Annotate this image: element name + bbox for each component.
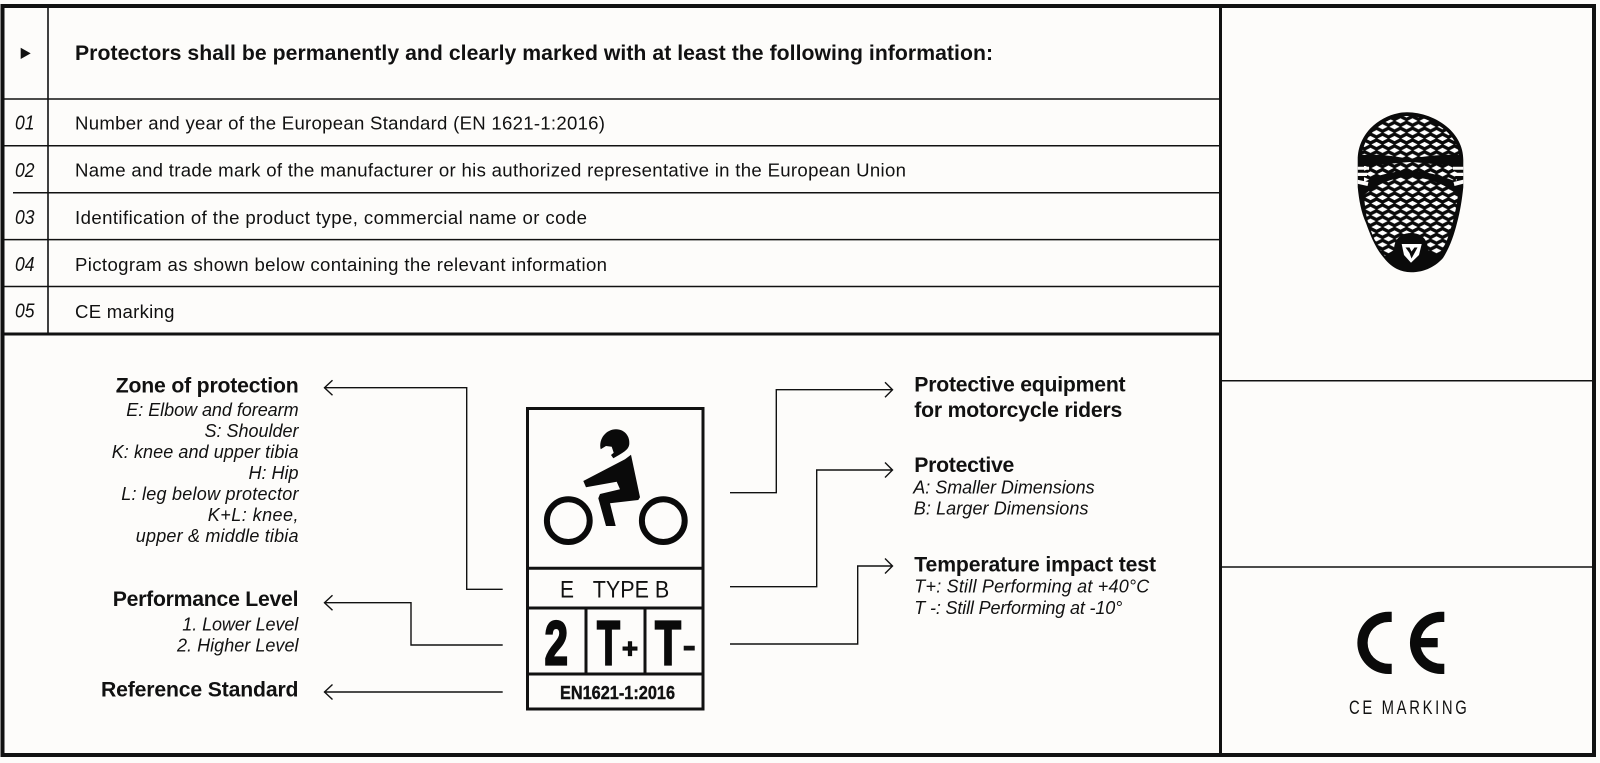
icon: CE mark — [1357, 612, 1444, 674]
pictogram T+: T — [597, 610, 620, 678]
CE marking caption: CE MARKING — [1349, 697, 1467, 718]
label: zone of protection: S: Shoulder — [204, 421, 300, 441]
middle lattice — [1364, 162, 1457, 182]
table heading: Protectors shall be permanently and clearly marked with at least the following information: — [75, 42, 993, 65]
label: protective dimensions: B: Larger Dimensions — [914, 498, 1088, 518]
label: temperature impact test: T+: Still Performing at +40°C — [914, 577, 1150, 597]
row 01: 01 — [15, 113, 34, 135]
label: protective equipment — [914, 374, 1126, 422]
logo — [1402, 244, 1422, 263]
row 03: 03 — [15, 207, 34, 229]
row 01: Number and year of the European Standard (EN 1621-1:2016) — [75, 112, 605, 133]
label: zone of protection: H: Hip — [248, 463, 298, 483]
pictogram — [528, 408, 703, 709]
arrow: temperature — [730, 558, 892, 644]
label: zone of protection — [112, 375, 300, 546]
row 05: CE marking — [75, 301, 174, 322]
arrow: protective equipment — [730, 382, 892, 493]
row 05 — [15, 300, 174, 322]
icon: motorcycle rider — [547, 429, 685, 542]
lower lattice — [1364, 177, 1458, 256]
arrow: performance level — [324, 595, 503, 645]
icon: back protector — [1354, 112, 1466, 272]
row 04: Pictogram as shown below containing the relevant information — [75, 254, 607, 275]
pictogram type — [560, 577, 669, 604]
pictogram T-: - — [682, 624, 696, 668]
pictogram T+: + — [622, 634, 638, 664]
upper lattice — [1362, 116, 1459, 159]
label: zone of protection: Zone of protection — [116, 375, 299, 398]
label: performance level — [113, 588, 300, 656]
label: temperature impact test — [914, 553, 1156, 618]
label: performance level: 2. Higher Level — [176, 636, 300, 656]
pictogram type: TYPE B — [593, 577, 669, 604]
label: protective dimensions — [912, 454, 1095, 518]
label: zone of protection: L: leg below protector — [121, 484, 300, 504]
row 02: Name and trade mark of the manufacturer or his authorized representative in the European Union — [75, 160, 906, 181]
row 04: 04 — [15, 254, 34, 276]
table: marking requirements — [4, 8, 1219, 334]
label: zone of protection: K: knee and upper tibia — [112, 442, 298, 462]
label: zone of protection: E: Elbow and forearm — [126, 400, 299, 420]
row 02: 02 — [15, 160, 34, 182]
pictogram level 2: 2 — [544, 610, 568, 678]
label: temperature impact test: T -: Still Performing at -10° — [914, 598, 1122, 618]
pictogram standard: EN1621-1:2016 — [560, 683, 675, 703]
label: reference standard: Reference Standard — [101, 679, 298, 702]
pictogram type: E — [560, 577, 574, 604]
arrow: protective — [730, 462, 892, 587]
label: zone of protection: K+L: knee, — [208, 505, 298, 525]
label: performance level: Performance Level — [113, 588, 298, 611]
label: protective dimensions: A: Smaller Dimensions — [912, 477, 1095, 497]
label: protective dimensions: Protective — [914, 454, 1015, 477]
arrow: reference standard — [324, 684, 503, 700]
row 03: Identification of the product type, commercial name or code — [75, 207, 587, 228]
arrow: zone of protection — [324, 380, 503, 589]
label: performance level: 1. Lower Level — [182, 615, 299, 635]
label: zone of protection: upper & middle tibia — [136, 526, 298, 546]
pictogram T-: T — [655, 610, 681, 678]
label: temperature impact test: Temperature impact test — [914, 553, 1156, 576]
side stripes — [1354, 168, 1466, 184]
label: protective equipment: Protective equipment — [914, 374, 1126, 397]
icon: header arrow — [21, 48, 31, 59]
label: protective equipment: for motorcycle riders — [914, 399, 1122, 422]
row 05: 05 — [15, 300, 35, 322]
